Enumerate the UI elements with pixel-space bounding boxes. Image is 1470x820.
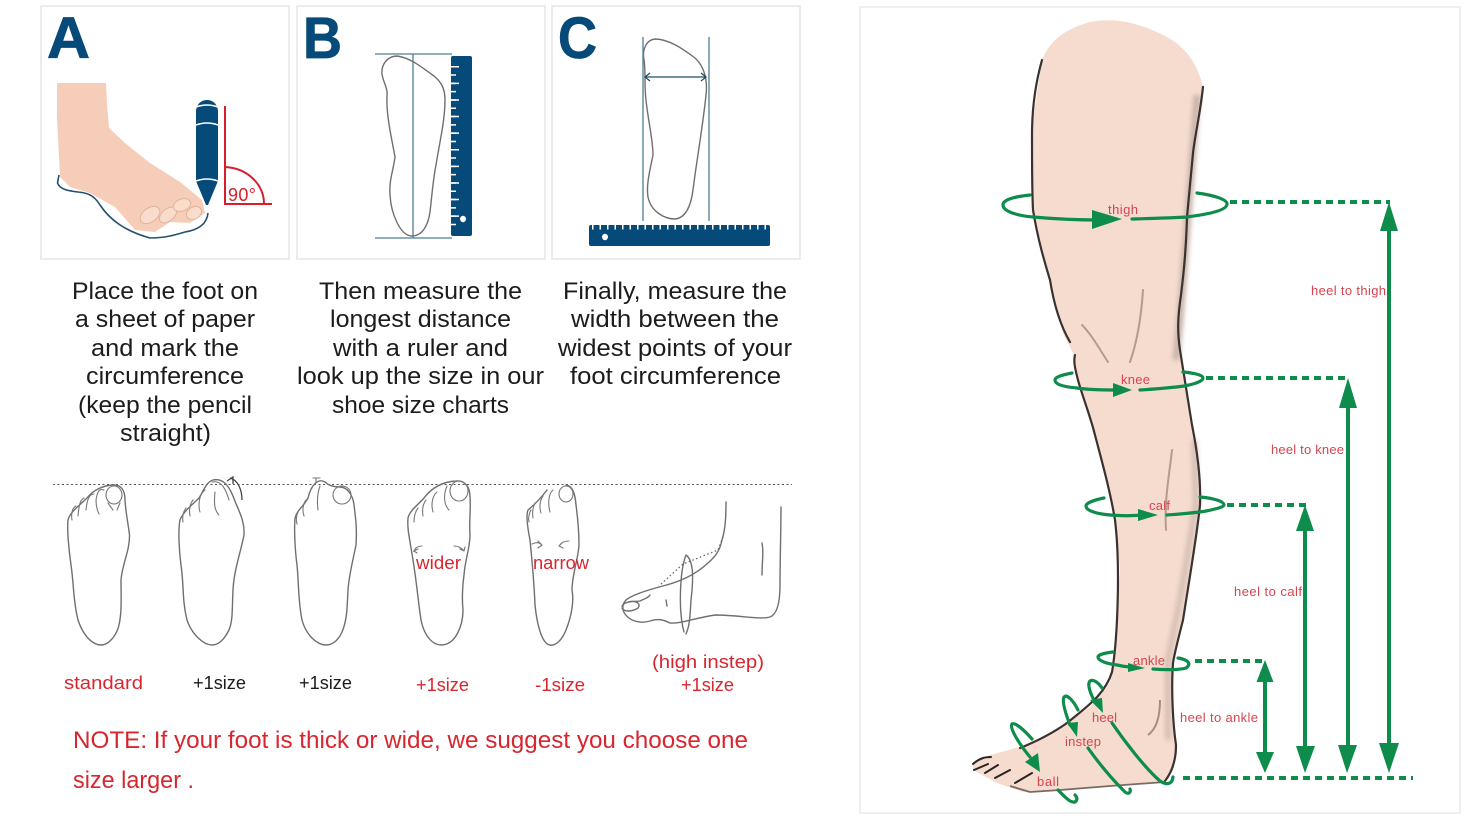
- note: NOTE: If your foot is thick or wide, we suggest you choose one: [73, 727, 748, 754]
- leg part labels: calf: [1149, 498, 1170, 513]
- panel: step B: [297, 6, 545, 259]
- ring: instep: [1063, 696, 1130, 793]
- labels: foot type results: +1size: [299, 673, 352, 693]
- panel: leg measurements: [860, 7, 1460, 813]
- foot type: standard: [68, 485, 130, 645]
- measure: heel to knee: [1206, 378, 1357, 773]
- text block: step C instructions: widest points of your: [557, 335, 792, 362]
- labels: foot type results: +1size: [193, 673, 246, 693]
- ring: knee: [1055, 372, 1203, 397]
- leg part labels: knee: [1121, 372, 1150, 387]
- labels: foot type results: +1size: [416, 675, 469, 695]
- baseline: heel level: [1183, 776, 1413, 780]
- text block: step A instructions: and mark the: [91, 335, 239, 362]
- text block: step C instructions: foot circumference: [570, 363, 781, 390]
- leg part labels: [1037, 202, 1170, 789]
- ring: ball: [1011, 724, 1077, 802]
- text block: step A instructions: a sheet of paper: [75, 306, 255, 333]
- panel: step C: [552, 6, 800, 259]
- measure: heel to thigh: [1230, 202, 1399, 773]
- foot type: narrow: [527, 485, 579, 645]
- icon: pencil: [196, 100, 218, 205]
- text block: step B instructions: [297, 278, 544, 419]
- text block: step A instructions: Place the foot on: [72, 278, 258, 305]
- ring: heel: [1089, 680, 1173, 784]
- text block: step A instructions: straight): [120, 420, 211, 447]
- icon: foot outline with width lines: [643, 37, 709, 221]
- icon: horizontal ruler: [589, 225, 770, 246]
- text block: step C instructions: [557, 278, 792, 390]
- text block: step B instructions: Then measure the: [319, 278, 522, 305]
- icon: vertical ruler: [451, 56, 472, 236]
- labels: foot type results: wider: [415, 553, 461, 573]
- measure: heel to ankle: heel to ankle: [1180, 710, 1258, 725]
- text block: step B instructions: shoe size charts: [332, 392, 509, 419]
- ring: calf: [1086, 497, 1224, 521]
- note: size larger .: [73, 767, 194, 794]
- foot type: high instep: [622, 502, 781, 634]
- leg part labels: heel: [1092, 710, 1117, 725]
- icon: 90 degree angle: [225, 106, 272, 205]
- text block: step B instructions: with a ruler and: [332, 335, 508, 362]
- text block: step B instructions: longest distance: [330, 306, 511, 333]
- leg part labels: instep: [1065, 734, 1101, 749]
- measure: heel to knee: heel to knee: [1271, 442, 1344, 457]
- foot type: long big toe: [179, 477, 244, 645]
- icon: 90 degree angle: 90°: [228, 185, 256, 205]
- labels: foot type results: -1size: [535, 675, 585, 695]
- leg part labels: ball: [1037, 774, 1059, 789]
- text block: step C instructions: Finally, measure the: [563, 278, 787, 305]
- letter B: B: [303, 6, 342, 71]
- text block: step C instructions: width between the: [570, 306, 779, 333]
- text block: step B instructions: look up the size in our: [297, 363, 544, 390]
- icon: foot on paper: [57, 83, 208, 238]
- foot type: long second toe: [295, 478, 356, 645]
- panel: step A: [41, 6, 289, 259]
- text block: step A instructions: [72, 278, 258, 447]
- labels: foot type results: standard: [64, 673, 143, 693]
- measure: heel to calf: [1227, 505, 1315, 773]
- ring: thigh: [1003, 193, 1227, 229]
- ring: ankle: [1098, 652, 1189, 672]
- labels: foot type results: [64, 553, 764, 695]
- icon: foot outline with length lines: [375, 54, 452, 238]
- labels: foot type results: +1size: [681, 675, 734, 695]
- measure: heel to calf: heel to calf: [1234, 584, 1302, 599]
- text block: step A instructions: circumference: [86, 363, 244, 390]
- letter A: A: [47, 6, 90, 71]
- labels: foot type results: (high instep): [652, 652, 764, 672]
- foot type: wide: [408, 481, 470, 645]
- labels: foot type results: narrow: [533, 553, 590, 573]
- letter C: C: [558, 6, 597, 71]
- leg part labels: ankle: [1133, 653, 1165, 668]
- leg part labels: thigh: [1108, 202, 1138, 217]
- measure: heel to ankle: [1180, 660, 1274, 773]
- note: [73, 727, 748, 794]
- measure: heel to thigh: heel to thigh: [1311, 283, 1386, 298]
- text block: step A instructions: (keep the pencil: [78, 392, 252, 419]
- leg illustration: [973, 20, 1203, 792]
